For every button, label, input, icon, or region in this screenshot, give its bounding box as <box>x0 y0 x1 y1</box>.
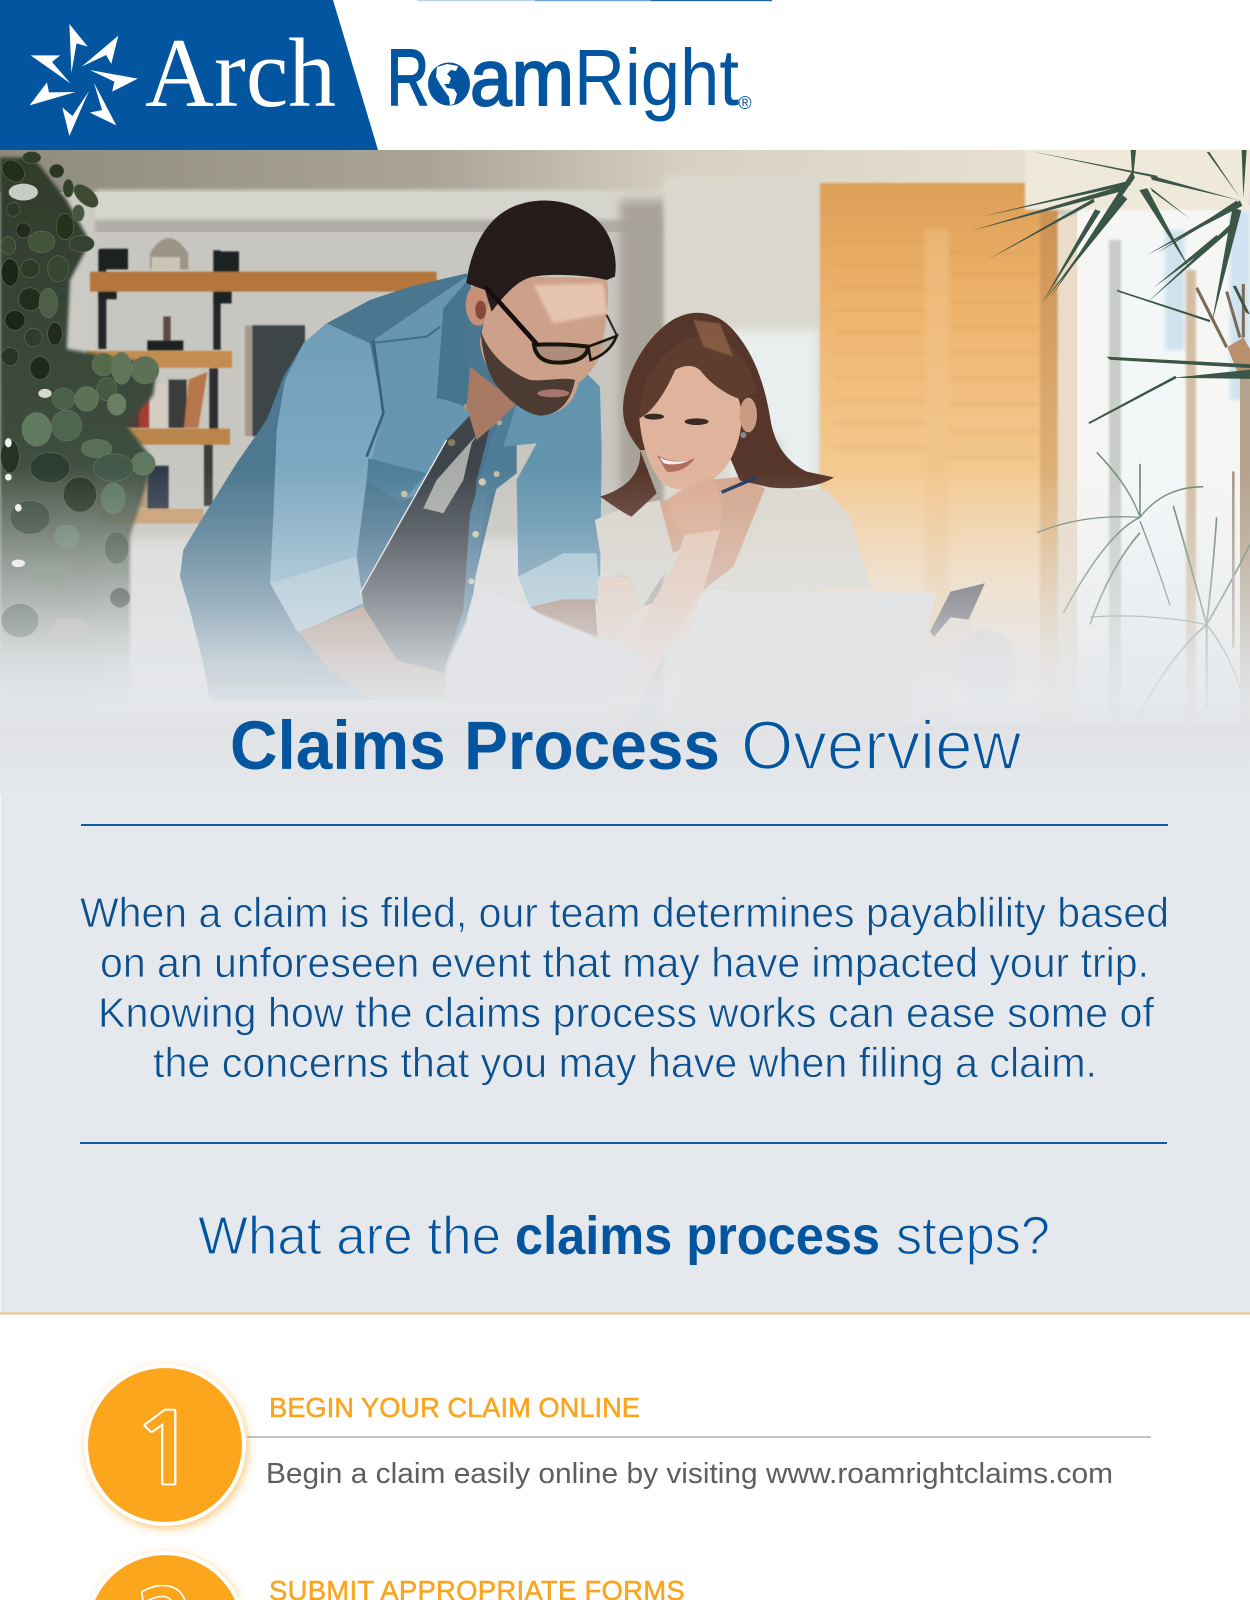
intro paragraph <box>80 889 1169 1086</box>
woman's face <box>639 320 757 489</box>
photo background room <box>0 150 1250 750</box>
lower plant fronds <box>1037 452 1250 720</box>
icon: Arch star <box>30 24 138 136</box>
woman's top <box>595 477 872 720</box>
intro paragraph: the concerns that you may have when filing a claim. <box>153 1039 1097 1086</box>
man <box>180 201 617 700</box>
man's forearms <box>298 599 598 700</box>
intro paragraph: on an unforeseen event that may have impacted your trip. <box>100 939 1149 986</box>
woman's hair <box>600 313 834 517</box>
panel: grey intro <box>0 707 1250 1314</box>
palm trunk <box>1197 284 1250 749</box>
RoamRight logo <box>387 33 752 122</box>
intro paragraph: When a claim is filed, our team determines payablility based <box>80 889 1169 936</box>
paper sheet <box>445 589 645 700</box>
step 1 badge: 1 <box>129 1402 203 1499</box>
wood shutters <box>820 183 1042 743</box>
RoamRight logo: R <box>387 33 429 122</box>
hero photo <box>0 150 1250 750</box>
Arch logo block <box>0 0 378 150</box>
title: Overview <box>741 707 1021 784</box>
Arch wordmark: Arch <box>145 19 336 128</box>
laptop <box>670 590 936 725</box>
RoamRight logo: Right <box>574 33 739 122</box>
title: Claims Process <box>230 707 720 784</box>
step 1 badge <box>84 1364 247 1528</box>
palm leaves <box>970 150 1250 424</box>
registered mark: ® <box>738 93 752 113</box>
step 1 heading: BEGIN YOUR CLAIM ONLINE <box>269 1392 640 1423</box>
header band <box>0 0 1250 150</box>
woman's hand and pen <box>667 477 757 535</box>
photo fade overlay <box>0 470 1250 725</box>
RoamRight logo: am <box>470 33 574 122</box>
man's shirt and body <box>180 273 602 700</box>
step 1 <box>84 1364 1151 1528</box>
palm plant right <box>970 150 1250 749</box>
woman's phone hand <box>907 583 1017 717</box>
intro paragraph: Knowing how the claims process works can ease some of <box>98 989 1154 1036</box>
section heading: What are the <box>198 1206 501 1266</box>
step 2 badge circle <box>91 1551 239 1600</box>
step 1 description: Begin a claim easily online by visiting www.roamrightclaims.com <box>266 1458 1113 1490</box>
woman <box>595 313 1017 720</box>
man's head <box>466 201 617 440</box>
section heading: steps? <box>896 1206 1050 1266</box>
plant left <box>0 152 159 705</box>
shelves and books <box>83 238 437 524</box>
section heading: claims process <box>515 1206 880 1266</box>
RoamRight logo: o <box>430 54 468 117</box>
window and frame <box>1025 150 1250 745</box>
icon: globe <box>428 62 470 106</box>
